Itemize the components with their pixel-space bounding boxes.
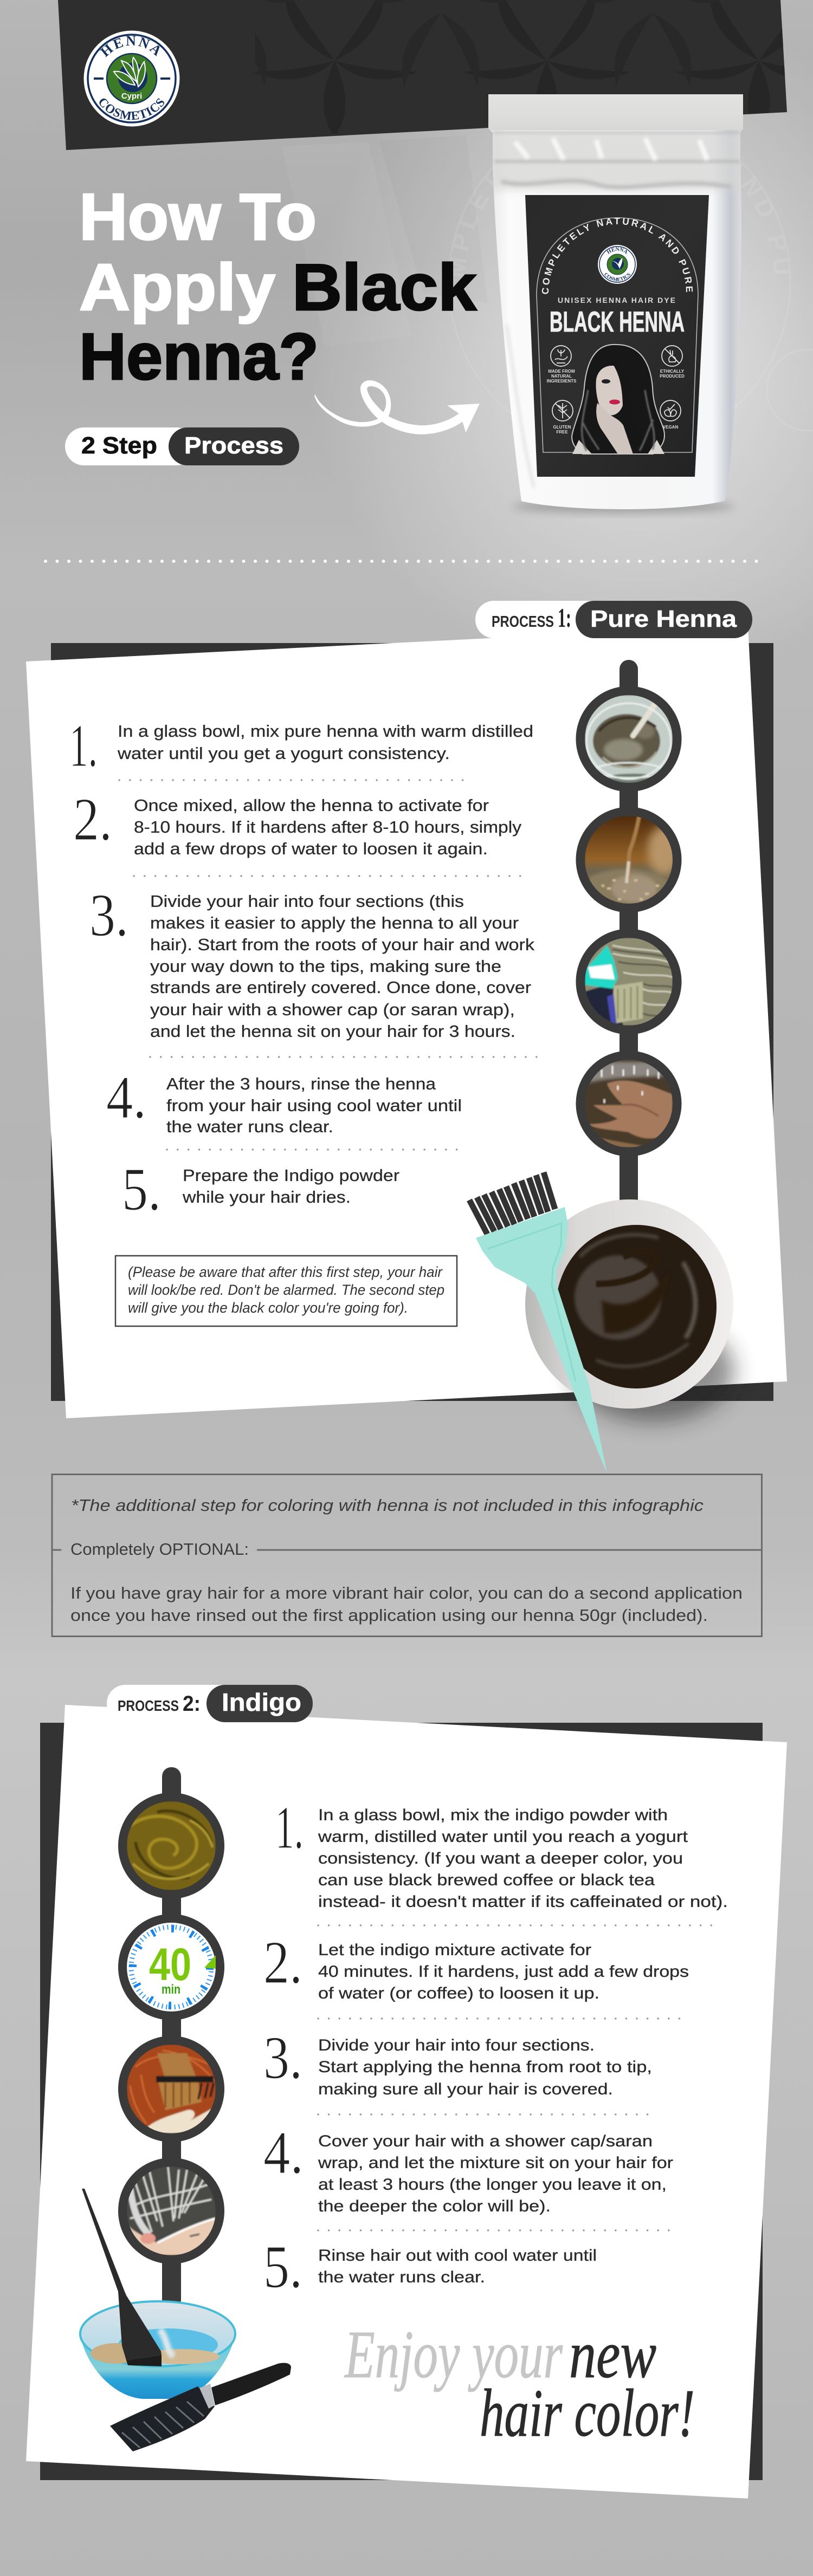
label icon captions: NATURAL (551, 374, 572, 379)
step 3: your way down to the tips, making sure the (150, 957, 501, 976)
step 3: 3. (89, 882, 128, 949)
mini logo: COSMETICS (605, 272, 630, 282)
process 1 tab: 1: (558, 602, 571, 633)
step 4 (263, 2119, 673, 2215)
step 2: add a few drops of water to loosen it again. (134, 839, 488, 858)
step 5: 5. (263, 2234, 302, 2301)
label arch frame (537, 218, 698, 452)
note box (115, 1256, 457, 1326)
step 4: at least 3 hours (the longer you leave it on, (318, 2176, 667, 2194)
mini logo: HENNA (606, 247, 627, 254)
step 1: warm, distilled water until you reach a yogurt (318, 1828, 688, 1846)
step 3: making sure all your hair is covered. (318, 2080, 613, 2098)
label icon captions: FREE (556, 430, 568, 434)
step 5: while your hair dries. (182, 1188, 351, 1206)
white paper (26, 626, 787, 1418)
brush bristles (126, 2355, 162, 2366)
step 5 (263, 2234, 597, 2301)
label icon captions (547, 369, 685, 434)
product pouch: BLACK HENNA (550, 306, 685, 338)
comb (110, 2363, 291, 2451)
label icons (551, 346, 682, 421)
pouch body (488, 94, 743, 509)
woman portrait (572, 345, 664, 454)
logo badge (83, 30, 180, 127)
bowl rim and interior (80, 2301, 235, 2366)
step 1: In a glass bowl, mix the indigo powder with (318, 1806, 668, 1824)
step 5 (122, 1156, 399, 1223)
photo: water poured on henna powder (585, 816, 673, 904)
product pouch: UNISEX HENNA HAIR DYE (558, 296, 677, 304)
optional note panel: *The additional step for coloring with henna is not included in this infographic (71, 1496, 704, 1515)
step 4: Cover your hair with a shower cap/saran (318, 2132, 653, 2150)
henna paste (556, 1225, 717, 1388)
curly arrow pointing at the pouch (314, 380, 480, 434)
mini logo (598, 245, 637, 284)
dark backing sheet (40, 1723, 763, 2480)
white paper (26, 1705, 787, 2499)
photo: brushing henna onto hair (585, 938, 675, 1027)
step 3: 3. (263, 2025, 302, 2092)
brush handle (476, 1207, 607, 1474)
process 1 tab (475, 601, 752, 638)
step 1: can use black brewed coffee or black tea (318, 1871, 655, 1889)
bristles (469, 1172, 555, 1234)
step 2 (263, 1929, 689, 2002)
bowl body (80, 2334, 235, 2399)
closing message: hair color! (480, 2376, 695, 2451)
dark backing sheet (51, 643, 773, 1401)
timer 40 min (127, 1923, 216, 2012)
step 3: and let the henna sit on your hair for 3 hours. (150, 1022, 515, 1041)
label icon captions: ETHICALLY (660, 369, 685, 374)
step 1: consistency. (If you want a deeper color, you (318, 1850, 683, 1867)
step 3: your hair with a shower cap (or saran wrap), (150, 1000, 515, 1019)
step 4: wrap, and let the mixture sit on your hair for (318, 2154, 673, 2172)
optional note panel: once you have rinsed out the first application using our henna 50gr (included). (70, 1606, 708, 1625)
step 4: the deeper the color will be). (318, 2197, 551, 2215)
closing message: Enjoy your (344, 2318, 563, 2392)
top dark banner (58, 0, 791, 150)
photo: combing henna through red hair (127, 2045, 216, 2133)
step 1 (275, 1794, 728, 1911)
title: Apply (79, 250, 275, 324)
panel: process 2 indigo (26, 1685, 787, 2499)
process 1 tab: PROCESS (492, 613, 554, 631)
step 4: 4. (263, 2119, 304, 2186)
step 5: Rinse hair out with cool water until (318, 2247, 597, 2264)
watermark seal behind the pouch (0, 0, 813, 452)
step 3: Divide your hair into four sections (this (150, 892, 464, 911)
step 2: 8-10 hours. If it hardens after 8-10 hours, simply (134, 817, 522, 836)
step 1 (69, 712, 533, 780)
step 1: 1. (275, 1794, 304, 1861)
process 1 tab: Pure Henna (590, 606, 737, 632)
2 step process pill (65, 427, 299, 465)
process 2 tab (107, 1685, 313, 1722)
2 step process pill: Process (184, 432, 283, 459)
step 2: of water (or coffee) to loosen it up. (318, 1984, 599, 2002)
2 step process pill: 2 Step (81, 432, 157, 459)
note box: will give you the black color you're going for). (128, 1300, 408, 1316)
optional note panel (52, 1475, 762, 1636)
step 2: 2. (263, 1929, 302, 1996)
step 3: hair). Start from the roots of your hair and work (150, 935, 535, 954)
step 4: After the 3 hours, rinse the henna (166, 1074, 436, 1093)
logo badge: HENNA (100, 36, 159, 57)
closing message: new (569, 2318, 656, 2392)
tint brush (82, 2189, 162, 2360)
process 2 tab: Indigo (222, 1688, 301, 1716)
closing message (344, 2318, 695, 2451)
timer 40 min: min (162, 1982, 180, 1997)
note box: (Please be aware that after this first step, your hair (128, 1264, 443, 1280)
title (79, 180, 476, 393)
title: Henna? (79, 320, 319, 393)
step 2: Once mixed, allow the henna to activate for (134, 796, 489, 815)
label icon captions: VEGAN (663, 425, 678, 430)
product pouch (488, 94, 743, 517)
photo: henna paste in glass bowl (585, 695, 673, 784)
step 1: In a glass bowl, mix pure henna with warm distilled (118, 722, 533, 741)
dotted divider (46, 560, 767, 563)
bowl (525, 1199, 733, 1409)
arc text: COMPLETELY NATURAL AND PURE (542, 218, 693, 294)
timeline rail (118, 1767, 224, 2309)
bowl of black henna with tint brush (469, 1172, 734, 1474)
step 4 (106, 1064, 462, 1136)
step 1: water until you get a yogurt consistency. (117, 744, 450, 763)
title: Black (292, 250, 476, 324)
step 2: 2. (73, 786, 112, 853)
step 3: makes it easier to apply the henna to all your (150, 913, 519, 932)
label icon captions: GLUTEN (553, 425, 571, 430)
photo: indigo paste (127, 1801, 216, 1890)
label icon captions: PRODUCED (660, 374, 685, 379)
step 3: Divide your hair into four sections. (318, 2036, 595, 2054)
step 5: 5. (122, 1156, 161, 1223)
step 1: 1. (69, 712, 98, 780)
step 3: strands are entirely covered. Once done, cover (150, 978, 531, 997)
step 3 (263, 2025, 652, 2098)
label icon captions: INGREDIENTS (547, 379, 577, 384)
label icon captions: MADE FROM (548, 369, 575, 374)
label (525, 195, 709, 477)
step 2: 40 minutes. If it hardens, just add a few drops (318, 1963, 689, 1981)
mixing bowl with tint brush and comb (80, 2189, 291, 2451)
title: How To (79, 180, 317, 254)
step 5: the water runs clear. (318, 2268, 485, 2286)
optional note panel: Completely OPTIONAL: (70, 1540, 249, 1559)
optional note panel: If you have gray hair for a more vibrant hair color, you can do a second application (70, 1584, 743, 1602)
process 2 tab: PROCESS (118, 1697, 179, 1714)
logo badge: COSMETICS (100, 98, 164, 120)
step 1: instead- it doesn't matter if its caffeinated or not). (318, 1893, 728, 1911)
timer 40 min: 40 (149, 1939, 191, 1990)
step 5: Prepare the Indigo powder (183, 1166, 399, 1185)
pouch seal and zipper folds (488, 94, 743, 488)
step 2: Let the indigo mixture activate for (318, 1941, 591, 1959)
step 2 (73, 786, 522, 858)
step 3 (89, 882, 535, 1041)
note box: will look/be red. Don't be alarmed. The second step (128, 1282, 444, 1298)
panel: process 1 pure henna (26, 601, 787, 1474)
logo badge: Cypri (121, 92, 142, 101)
process 2 tab: 2: (183, 1692, 201, 1716)
liquid and paste (91, 2328, 220, 2364)
step 4: from your hair using cool water until (166, 1096, 462, 1115)
step 4: 4. (106, 1064, 146, 1131)
photo: shower cap on hair (127, 2166, 216, 2255)
timeline rail (576, 660, 682, 1212)
step 4: the water runs clear. (166, 1117, 333, 1136)
photo: rinsing hair by hand (585, 1060, 673, 1147)
step 3: Start applying the henna from root to tip, (318, 2058, 652, 2076)
